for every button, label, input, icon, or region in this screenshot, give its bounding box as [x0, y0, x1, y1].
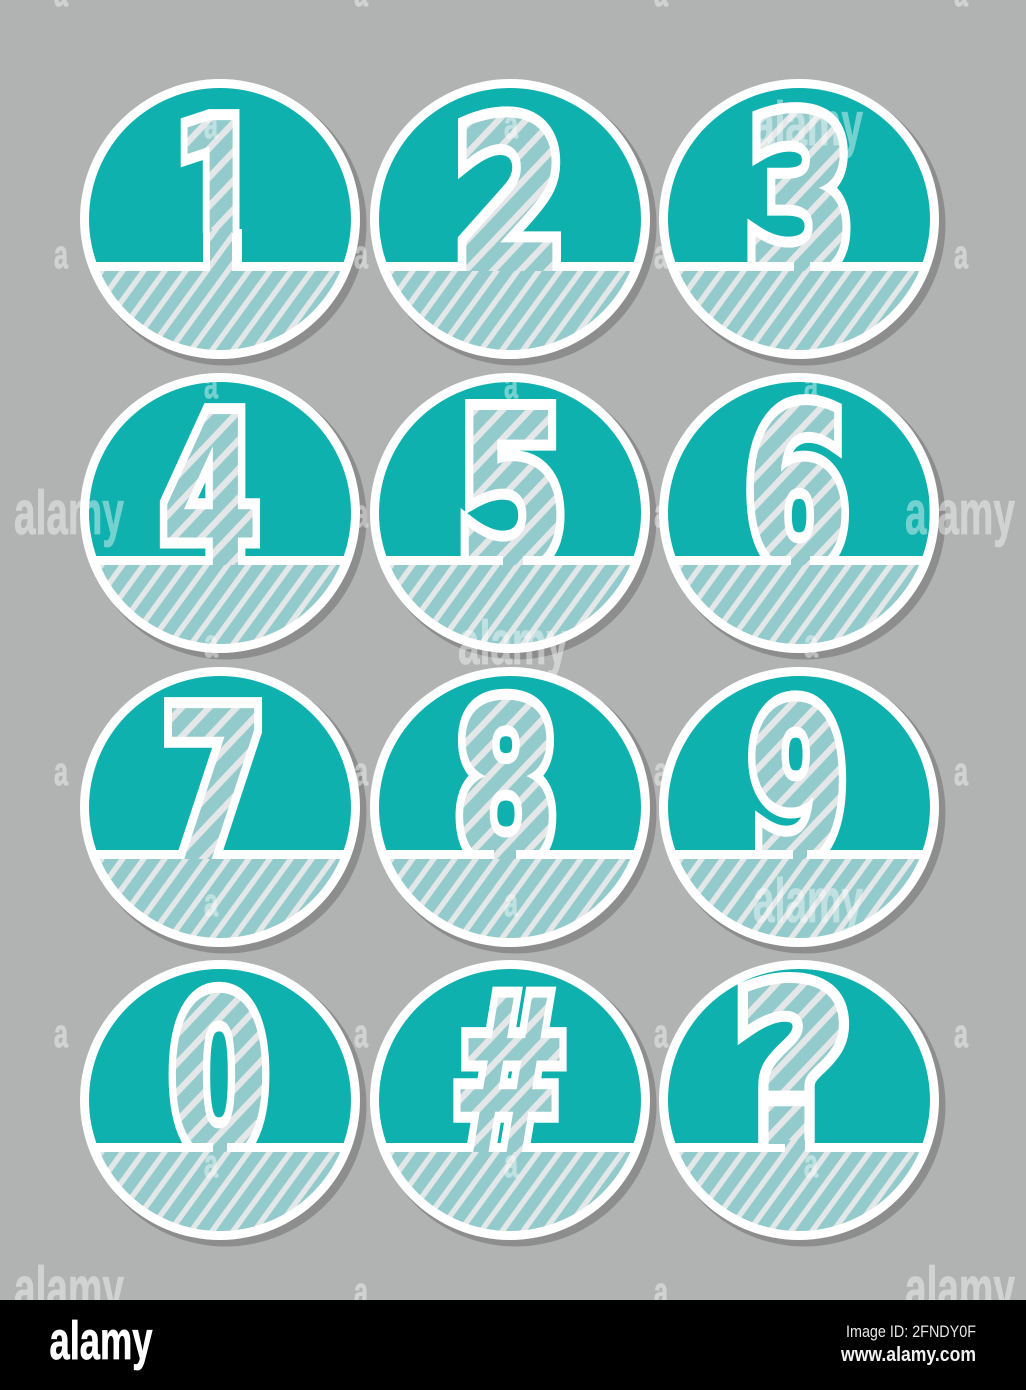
badge: 2: [370, 79, 656, 366]
watermarks: a: [354, 1012, 368, 1056]
watermarks: alamy: [753, 90, 863, 159]
image id: Image ID: 2FNDY0F: [846, 1322, 976, 1341]
watermarks: a: [804, 363, 818, 407]
watermarks: a: [504, 363, 518, 407]
numeral 9: 9: [748, 662, 848, 911]
footer logo: alamy: [50, 1311, 152, 1371]
numeral 2: 2: [454, 79, 566, 320]
numeral 8: [456, 688, 556, 859]
watermarks: a: [954, 233, 968, 277]
badge: 5: [370, 368, 656, 660]
numeral 0: [168, 982, 270, 1152]
numeral 0: 0: [169, 953, 269, 1204]
numeral 7: 7: [162, 667, 266, 908]
watermarks: a: [354, 492, 368, 536]
watermarks: alamy: [14, 1255, 124, 1324]
numeral 8: 8: [454, 660, 558, 911]
numeral 5: [460, 399, 565, 565]
badge: hash: [370, 952, 656, 1246]
watermarks: a: [204, 622, 218, 666]
badge: 3: [659, 74, 946, 366]
question mark neck: [785, 1140, 805, 1154]
badge: 6: [659, 366, 946, 660]
numeral 4: 4: [161, 373, 259, 614]
badge: 4: [80, 373, 366, 660]
watermarks: a: [954, 1012, 968, 1056]
watermarks: a: [654, 1270, 668, 1314]
watermarks: a: [804, 622, 818, 666]
watermarks: a: [654, 492, 668, 536]
numeral 6: [746, 394, 850, 565]
watermarks: a: [354, 750, 368, 794]
numeral 1: 1: [173, 79, 263, 320]
watermarks: alamy: [753, 867, 863, 936]
watermarks: a: [504, 1142, 518, 1186]
watermarks: a: [654, 750, 668, 794]
watermarks: a: [54, 750, 68, 794]
numeral 1: [180, 109, 242, 271]
numeral 3: 3: [745, 74, 855, 323]
numeral 3: [747, 102, 851, 271]
hash symbol: #: [451, 952, 569, 1203]
badge: 8: [370, 660, 656, 954]
watermarks: a: [654, 1012, 668, 1056]
watermarks: a: [204, 103, 218, 147]
watermarks: a: [804, 1142, 818, 1186]
website: www.alamy.com: [840, 1344, 976, 1366]
watermarks: alamy: [458, 609, 568, 678]
watermarks: a: [54, 233, 68, 277]
watermarks: a: [204, 363, 218, 407]
badge: 9: [659, 662, 946, 954]
watermarks: a: [54, 1012, 68, 1056]
watermarks: a: [504, 103, 518, 147]
watermarks: a: [504, 881, 518, 925]
watermarks: a: [204, 881, 218, 925]
badge: 7: [80, 667, 366, 954]
watermarks: a: [354, 1270, 368, 1314]
watermarks: a: [354, 233, 368, 277]
footer bar: [0, 1300, 1026, 1390]
numeral 6: 6: [744, 366, 850, 618]
badge: 0: [80, 953, 366, 1246]
watermarks: a: [204, 1142, 218, 1186]
watermarks: a: [654, 233, 668, 277]
watermarks: alamy: [14, 479, 124, 548]
badge: 1: [80, 79, 366, 366]
numeral 5: 5: [456, 368, 568, 617]
watermarks: a: [954, 750, 968, 794]
badge: question mark: [659, 944, 946, 1246]
question mark symbol: ?: [734, 944, 852, 1196]
numeral 9: [748, 690, 846, 859]
